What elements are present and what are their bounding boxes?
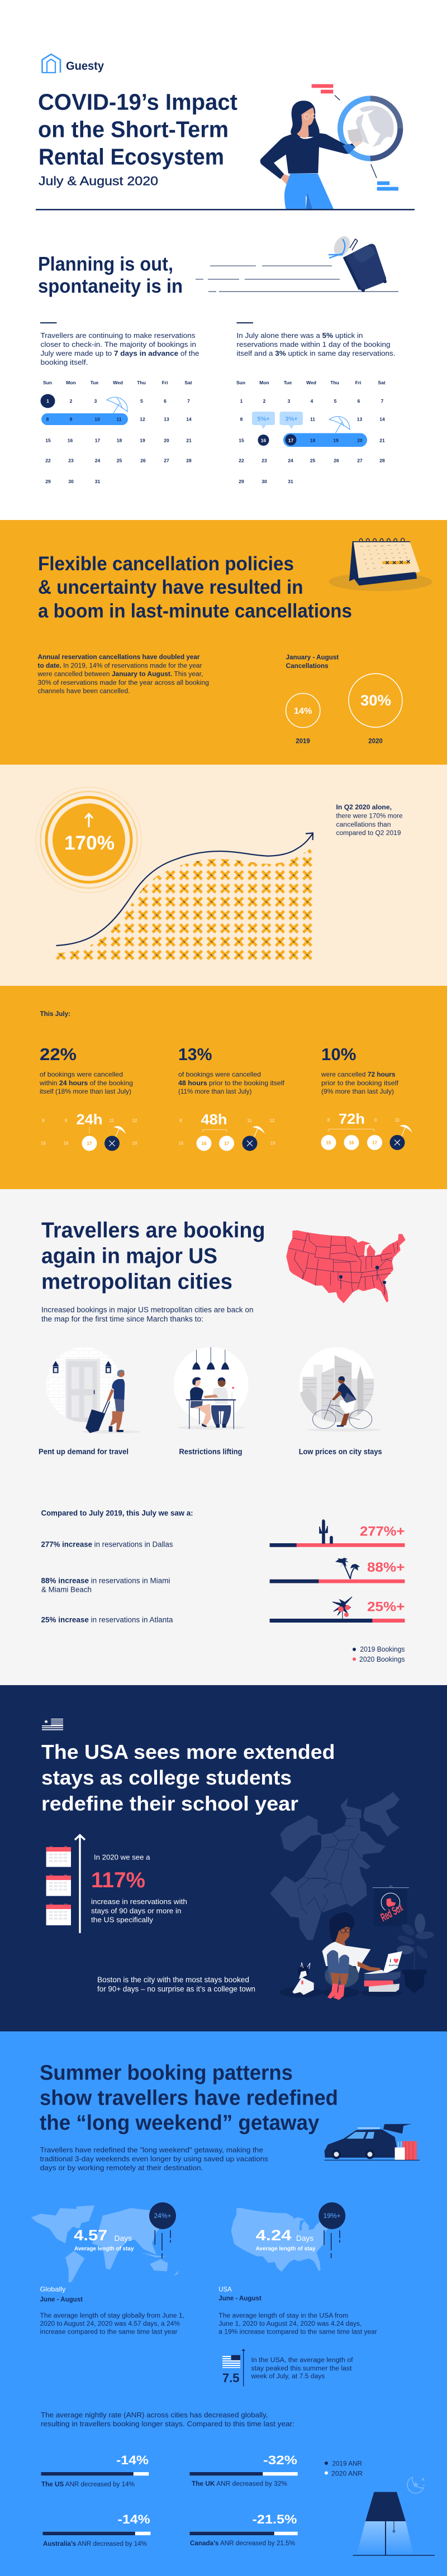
calendar: right: 22 bbox=[239, 458, 244, 464]
mini calendar: 72h: 11 bbox=[395, 1118, 400, 1123]
mini calendar: 48h: 8 bbox=[179, 1118, 182, 1123]
legend: ANR: 2020 ANR bbox=[331, 2471, 363, 2478]
stat: 10 percent: were cancelled 72 hours bbox=[321, 1070, 396, 1078]
legend: ANR: 2019 ANR bbox=[332, 2461, 362, 2468]
calendar: left: 23 bbox=[68, 458, 74, 464]
text block: right: itself and a 3% uptick in same day reservations. bbox=[237, 350, 396, 357]
row: Miami: 88% increase in reservations in Miami bbox=[41, 1576, 170, 1585]
stat: 22 percent: of bookings were cancelled bbox=[40, 1070, 123, 1078]
calendar: right: 27 bbox=[357, 458, 363, 464]
calendar: left: Sun bbox=[43, 380, 52, 385]
calendar: left: 16 bbox=[68, 438, 73, 443]
bar: Canada ANR: -21.5% bbox=[253, 2512, 297, 2526]
map: world average stay: 4.57 bbox=[74, 2227, 107, 2244]
map: USA average stay bbox=[231, 2202, 345, 2272]
text block: Q2 2020: there were 170% more bbox=[336, 813, 402, 820]
stat: 13 percent bbox=[178, 1044, 285, 1095]
calendar: right: 13 bbox=[357, 417, 362, 422]
heading: USA extended stays: The USA sees more extended bbox=[41, 1740, 335, 1763]
text block: globally bbox=[40, 2286, 184, 2336]
legend: ANR bbox=[325, 2461, 363, 2478]
heading: travellers booking: Travellers are booking bbox=[41, 1219, 265, 1242]
text block: annual cancellations: channels have been cancelled. bbox=[38, 688, 130, 695]
stat: 117 percent: the US specifically bbox=[91, 1916, 154, 1924]
map: world average stay: Average length of stay bbox=[74, 2246, 134, 2252]
mini calendar: 72h bbox=[321, 1110, 412, 1150]
text block: USA: USA bbox=[218, 2286, 232, 2293]
panel: header and planning bbox=[0, 0, 447, 520]
calendar: left: 26 bbox=[140, 458, 146, 464]
mini calendar: 72h: 72h bbox=[339, 1110, 365, 1127]
chart: cancellation circles: 2020 bbox=[368, 738, 383, 745]
heading: cancellation: a boom in last-minute cancellations bbox=[38, 600, 352, 622]
arrow: upward bbox=[75, 1835, 85, 1933]
logo: Guesty: Guesty bbox=[66, 60, 104, 73]
text block: annual cancellations: to date. In 2019, 14% of reservations made for the year bbox=[38, 662, 202, 669]
calendar: left: 2 bbox=[70, 398, 73, 404]
mini calendar: 72h: 17 bbox=[372, 1141, 377, 1145]
calendar: left: 31 bbox=[95, 479, 100, 484]
calendar: left: 19 bbox=[140, 438, 145, 443]
text block: left: booking itself. bbox=[40, 359, 88, 366]
text block: ANR: resulting in travellers booking longer stays. Compared to this time last year: bbox=[41, 2420, 294, 2428]
calendar: left: Wed bbox=[113, 380, 123, 385]
text block: increased bookings: the map for the first time since March thanks to: bbox=[41, 1315, 203, 1323]
illustration: couple at restaurant table bbox=[174, 1347, 248, 1429]
row: Atlanta bbox=[41, 1597, 405, 1624]
row: Dallas bbox=[41, 1520, 405, 1548]
calendar: right: 18 bbox=[310, 438, 315, 443]
text block: USA: The average length of stay in the USA from bbox=[218, 2312, 348, 2319]
heading: summer patterns bbox=[40, 2061, 338, 2135]
row: Miami: & Miami Beach bbox=[41, 1585, 92, 1594]
stat: 22 percent: itself (18% more than last July) bbox=[40, 1087, 131, 1095]
title: COVID-19’s Impact bbox=[38, 89, 237, 115]
bar: US ANR bbox=[41, 2453, 149, 2488]
heading: cancellation bbox=[38, 553, 352, 622]
chart: cancellation circles: Cancellations bbox=[286, 663, 329, 670]
text block: Q2 2020: compared to Q2 2019 bbox=[336, 830, 401, 837]
mini calendar: 24h: 12 bbox=[132, 1118, 137, 1123]
text block: annual cancellations: were cancelled between January to August. This year, bbox=[37, 671, 203, 678]
illustration: desk calendar bbox=[329, 538, 432, 591]
mini calendar: 72h: 8 bbox=[327, 1118, 330, 1123]
text block: long weekend: traditional 3-day weekends even longer by using saved up vacations bbox=[40, 2155, 268, 2163]
heading: travellers booking: again in major US bbox=[41, 1244, 217, 1268]
stat: 117 percent: increase in reservations with bbox=[91, 1897, 187, 1906]
illustration: student with dog, books and pennant bbox=[279, 1886, 434, 2000]
text block: USA: June - August bbox=[218, 2296, 261, 2302]
illustration: Boston map bbox=[270, 1792, 400, 1940]
chart: cancellation circles bbox=[286, 655, 402, 745]
calendar: right: Wed bbox=[306, 380, 316, 385]
calendar: right: 28 bbox=[379, 458, 385, 464]
bar: UK ANR: -32% bbox=[263, 2453, 297, 2467]
calendar: left: 25 bbox=[117, 458, 122, 464]
calendar: right: Mon bbox=[259, 380, 269, 385]
map: world average stay: 24%+ bbox=[154, 2213, 172, 2220]
calendar: left: 13 bbox=[164, 417, 169, 422]
text block: right bbox=[237, 322, 396, 357]
panel: this July bbox=[0, 986, 447, 1189]
label: pent up demand: Pent up demand for travel bbox=[39, 1448, 129, 1456]
calendar: left: 10 bbox=[94, 417, 100, 422]
bar: UK ANR bbox=[189, 2453, 298, 2488]
mini calendar: 48h: 48h bbox=[201, 1111, 227, 1128]
calendar: right: 24 bbox=[288, 458, 293, 464]
stat: 22 percent: within 24 hours of the booking bbox=[39, 1079, 133, 1087]
callout: 7.5 days: stay peaked this summer the last bbox=[251, 2365, 352, 2372]
panel: 170 percent chart bbox=[0, 765, 447, 986]
text block: annual cancellations bbox=[37, 654, 209, 695]
row: Atlanta: 25%+ bbox=[367, 1600, 405, 1614]
stat: 10 percent bbox=[321, 1044, 399, 1095]
text block: globally: increase compared to the same time last year bbox=[40, 2329, 178, 2336]
logo: Guesty bbox=[42, 54, 104, 73]
label: this July: This July: bbox=[40, 1011, 70, 1018]
text block: Boston: Boston is the city with the most stays booked bbox=[97, 1976, 249, 1984]
illustration: woman holding globe bbox=[260, 84, 400, 209]
mini calendar: 72h: 0 bbox=[374, 1118, 377, 1123]
illustration: cyclist in the city bbox=[299, 1347, 381, 1432]
calendar: left: 7 bbox=[187, 398, 190, 404]
calendar: left: 3 bbox=[94, 398, 97, 404]
stat: 13 percent: (11% more than last July) bbox=[178, 1087, 251, 1095]
calendar: right: 17 bbox=[288, 438, 293, 443]
callout: 7.5 days: week of July, at 7.5 days bbox=[250, 2373, 325, 2380]
bar: Canada ANR: Canada’s ANR decreased by 21.5% bbox=[190, 2540, 295, 2547]
calendar: left: 17 bbox=[95, 438, 100, 443]
text block: left bbox=[40, 322, 199, 366]
heading: cancellation: & uncertainty have resulted in bbox=[38, 576, 303, 598]
calendar: right: 6 bbox=[358, 398, 360, 404]
callout: 7.5 days bbox=[222, 2349, 353, 2386]
text block: annual cancellations: Annual reservation cancellations have doubled year bbox=[38, 654, 200, 661]
stat: 10 percent: (9% more than last July) bbox=[321, 1087, 394, 1095]
calendar: left: 15 bbox=[45, 438, 51, 443]
text block: increased bookings: Increased bookings in major US metropolitan cities are back on bbox=[41, 1306, 254, 1314]
map: world average stay: Days bbox=[114, 2234, 132, 2243]
heading: cancellation: Flexible cancellation policies bbox=[38, 553, 294, 575]
stat: 117 percent: 117% bbox=[91, 1868, 145, 1892]
icon: three calendars bbox=[46, 1846, 71, 1925]
panel: summer booking patterns bbox=[0, 2031, 447, 2576]
callout: 7.5 days: 7.5 bbox=[222, 2371, 239, 2385]
calendar: right: 20 bbox=[357, 438, 363, 443]
title: Rental Ecosystem bbox=[39, 144, 224, 170]
text block: right: In July alone there was a 5% uptick in bbox=[237, 332, 363, 340]
arrow: growth curve bbox=[56, 833, 313, 946]
mini calendar: 24h: 11 bbox=[110, 1118, 115, 1123]
calendar: left: 18 bbox=[117, 438, 122, 443]
mini calendar: 48h: 17 bbox=[224, 1141, 230, 1146]
calendar: right: 30 bbox=[261, 479, 267, 484]
text block: Boston: for 90+ days – no surprise as it’s a college town bbox=[97, 1985, 255, 1993]
calendar: right: Sat bbox=[378, 380, 386, 385]
row: Dallas: 277% increase in reservations in Dallas bbox=[41, 1540, 173, 1548]
heading: planning: Planning is out, bbox=[38, 254, 173, 275]
map: USA average stay: Days bbox=[296, 2234, 313, 2243]
mini calendar: 24h: 9 bbox=[65, 1118, 68, 1123]
bar: Canada ANR bbox=[189, 2512, 298, 2547]
calendar: right: 25 bbox=[310, 458, 315, 464]
map: USA average stay: Average length of stay bbox=[256, 2246, 316, 2252]
mini calendar: 24h: 17 bbox=[87, 1141, 92, 1146]
row: Miami bbox=[41, 1558, 405, 1594]
calendar: left: 20 bbox=[164, 438, 169, 443]
chart: small marker bbox=[307, 849, 312, 853]
calendar: left: 12 bbox=[140, 417, 145, 422]
calendar: left: 29 bbox=[45, 479, 51, 484]
illustration: student with dog, books and pennant: Red Sox bbox=[378, 1901, 406, 1924]
calendar: left: 5 bbox=[140, 398, 143, 404]
chart: cancellation circles: January - August bbox=[286, 655, 339, 661]
heading: summer patterns: show travellers have redefined bbox=[40, 2087, 338, 2110]
divider bbox=[36, 209, 415, 210]
calendar: left: 1 bbox=[46, 398, 49, 404]
stat: 22 percent bbox=[39, 1044, 133, 1095]
text block: ANR bbox=[41, 2411, 294, 2428]
text block: globally: Globally bbox=[40, 2286, 66, 2293]
text block: USA: June 1, 2020 to August 24, 2020 was 4.24 days, bbox=[218, 2321, 362, 2327]
map: USA average stay: 19%+ bbox=[324, 2213, 341, 2220]
chart: cancellation circles: 2019 bbox=[296, 738, 310, 745]
text block: globally: 2020 to August 24, 2020 was 4.57 days, a 24% bbox=[40, 2321, 180, 2327]
calendar: right: 5%+ bbox=[257, 416, 270, 422]
text block: ANR: The average nightly rate (ANR) across cities has decreased globally, bbox=[41, 2411, 268, 2419]
bar: US ANR: -14% bbox=[116, 2453, 149, 2467]
calendar: right: 19 bbox=[333, 438, 339, 443]
stat circle: 170% bbox=[36, 787, 142, 893]
calendar: right: Sun bbox=[236, 380, 245, 385]
illustration: student with dog, books and pennant: I bbox=[389, 1958, 391, 1963]
text block: long weekend bbox=[40, 2146, 268, 2172]
subtitle: July & August 2020 bbox=[39, 174, 158, 188]
heading: compared to July: Compared to July 2019, this July we saw a: bbox=[41, 1509, 193, 1517]
mini calendar: 72h: 15 bbox=[326, 1141, 331, 1145]
calendar: right: Tue bbox=[284, 380, 292, 385]
calendar: left: 9 bbox=[70, 417, 73, 422]
heading: planning: spontaneity is in bbox=[38, 275, 183, 297]
title: on the Short-Term bbox=[38, 116, 229, 142]
calendar: left: Sat bbox=[184, 380, 192, 385]
text block: left: closer to check-in. The majority of bookings in bbox=[40, 341, 196, 349]
chart: cancellation circles: 30% bbox=[360, 692, 391, 709]
calendar: right: 31 bbox=[288, 479, 293, 484]
text block: USA bbox=[218, 2286, 377, 2336]
calendar: left: Fri bbox=[162, 380, 168, 385]
mini calendar: 48h: 19 bbox=[270, 1141, 275, 1146]
text block: globally: June - August bbox=[40, 2297, 83, 2303]
stat: 13 percent: 48 hours prior to the booking itself bbox=[178, 1079, 285, 1087]
map: USA with pins bbox=[286, 1230, 406, 1303]
mini calendar: 48h: 11 bbox=[247, 1118, 252, 1123]
mini calendar: 24h: 16 bbox=[64, 1141, 69, 1146]
heading: USA extended stays bbox=[41, 1740, 335, 1815]
calendar: right: 14 bbox=[379, 417, 385, 422]
panel: metropolitan cities bbox=[0, 1189, 447, 1685]
calendar: left: 11 bbox=[116, 417, 122, 422]
mini calendar: 24h: 15 bbox=[41, 1141, 46, 1146]
row: Dallas: 277%+ bbox=[360, 1524, 405, 1539]
callout: 7.5 days: In the USA, the average length of bbox=[251, 2357, 353, 2364]
stat: 13 percent: of bookings were cancelled bbox=[178, 1070, 261, 1078]
text block: left: July were made up to 7 days in advance of the bbox=[40, 350, 199, 357]
mini calendar: 24h: 19 bbox=[132, 1141, 137, 1146]
stat: 117 percent: In 2020 we see a bbox=[94, 1853, 150, 1861]
illustration: man with suitcase at door bbox=[46, 1347, 141, 1433]
bar: Australia ANR: Australia’s ANR decreased by 14% bbox=[43, 2541, 147, 2548]
illustration: suitcase with speed lines bbox=[196, 233, 398, 292]
stat: 10 percent: prior to the booking itself bbox=[321, 1079, 399, 1087]
calendar: right: 4 bbox=[311, 398, 313, 404]
calendar: right: Thu bbox=[330, 380, 339, 385]
label: low prices: Low prices on city stays bbox=[299, 1448, 382, 1456]
heading: travellers booking: metropolitan cities bbox=[41, 1270, 232, 1294]
map: world average stay bbox=[31, 2202, 179, 2283]
heading: travellers booking bbox=[41, 1219, 265, 1294]
calendar: left: 27 bbox=[164, 458, 169, 464]
calendar: right: 21 bbox=[379, 438, 385, 443]
calendar: left: 28 bbox=[186, 458, 192, 464]
mini calendar: 72h: 16 bbox=[349, 1141, 354, 1145]
mini calendar: 48h bbox=[179, 1111, 275, 1151]
calendar: right: 5 bbox=[334, 398, 337, 404]
chart: growth area of crosses bbox=[54, 852, 314, 962]
calendar: left: 14 bbox=[186, 417, 192, 422]
calendar: left: 8 bbox=[46, 417, 49, 422]
map: USA average stay: 4.24 bbox=[256, 2227, 292, 2244]
calendar: left bbox=[40, 380, 192, 484]
calendar: left: 30 bbox=[68, 479, 74, 484]
bar: Australia ANR: -14% bbox=[118, 2512, 150, 2526]
calendar: left: Mon bbox=[66, 380, 76, 385]
text block: Q2 2020: cancellations than bbox=[336, 822, 391, 828]
calendar: right: 1 bbox=[240, 398, 243, 404]
calendar: right: 8 bbox=[240, 417, 243, 422]
text block: Q2 2020 bbox=[336, 804, 402, 837]
mini calendar: 24h bbox=[41, 1111, 137, 1151]
mini calendar: 24h: 8 bbox=[42, 1118, 45, 1123]
legend: bookings: 2020 Bookings bbox=[359, 1656, 405, 1663]
calendar: left: Tue bbox=[91, 380, 99, 385]
heading: USA extended stays: stays as college students bbox=[41, 1766, 292, 1789]
calendar: right: 15 bbox=[239, 438, 244, 443]
row: Miami: 88%+ bbox=[367, 1560, 405, 1575]
stat: 117 percent: stays of 90 days or more in bbox=[91, 1907, 181, 1915]
text block: globally: The average length of stay globally from June 1, bbox=[40, 2312, 184, 2319]
text block: long weekend: Travellers have redefined the "long weekend" getaway, making the bbox=[40, 2146, 263, 2154]
mini calendar: 48h: 16 bbox=[202, 1141, 207, 1146]
mini calendar: 48h: 15 bbox=[179, 1141, 184, 1146]
illustration: car with luggage bbox=[325, 2124, 420, 2160]
stat: 22 percent: 22% bbox=[40, 1044, 77, 1064]
heading: summer patterns: the “long weekend” getaway bbox=[40, 2111, 320, 2135]
mini calendar: 24h: 24h bbox=[76, 1111, 103, 1128]
heading: summer patterns: Summer booking patterns bbox=[40, 2061, 293, 2084]
row: Atlanta: 25% increase in reservations in Atlanta bbox=[41, 1615, 173, 1624]
calendar: right: 16 bbox=[261, 438, 266, 443]
text block: left: Travellers are continuing to make reservations bbox=[40, 332, 196, 340]
calendar: right: Fri bbox=[355, 380, 361, 385]
stat: 117 percent bbox=[91, 1853, 187, 1924]
calendar: left: 21 bbox=[186, 438, 192, 443]
calendar: right: 2 bbox=[263, 398, 266, 404]
text block: long weekend: days or by working remotely at their destination. bbox=[40, 2164, 203, 2172]
text block: Q2 2020: In Q2 2020 alone, bbox=[336, 804, 392, 811]
title bbox=[38, 89, 237, 170]
calendar: left: Thu bbox=[137, 380, 146, 385]
calendar: right: 3%+ bbox=[285, 416, 298, 422]
stat circle: 170%: 170% bbox=[64, 832, 115, 854]
stat: 13 percent: 13% bbox=[178, 1044, 212, 1064]
calendar: right: 23 bbox=[261, 458, 267, 464]
text block: annual cancellations: 30% of reservations made for the year across all booking bbox=[38, 680, 209, 686]
calendar: left: 6 bbox=[164, 398, 167, 404]
bar: UK ANR: The UK ANR decreased by 32% bbox=[192, 2481, 287, 2488]
illustration: student with dog, books and pennant: BOSTON bbox=[389, 1964, 398, 1967]
calendar: right: 26 bbox=[334, 458, 339, 464]
heading: planning bbox=[38, 254, 183, 297]
text block: Boston bbox=[97, 1976, 255, 1993]
panel: extended stays bbox=[0, 1685, 447, 2031]
text block: increased bookings bbox=[41, 1306, 254, 1323]
bar: US ANR: The US ANR decreased by 14% bbox=[41, 2481, 135, 2488]
calendar: left: 22 bbox=[45, 458, 51, 464]
calendar: right: 7 bbox=[381, 398, 384, 404]
chart: cancellation circles: 14% bbox=[294, 707, 312, 716]
calendar: right bbox=[236, 380, 386, 484]
icon: flag bbox=[42, 1719, 63, 1730]
calendar: right: 11 bbox=[310, 417, 315, 422]
text block: right: reservations made within 1 day of the booking bbox=[237, 341, 391, 349]
calendar: right: 29 bbox=[239, 479, 244, 484]
panel: flexible cancellation bbox=[0, 520, 447, 765]
legend: bookings bbox=[353, 1645, 405, 1663]
legend: bookings: 2019 Bookings bbox=[360, 1645, 405, 1653]
calendar: left: 24 bbox=[95, 458, 100, 464]
bar: Australia ANR bbox=[42, 2512, 150, 2548]
stat: 10 percent: 10% bbox=[321, 1044, 356, 1064]
illustration: lamp and moon bbox=[353, 2477, 435, 2555]
label: restrictions lifting: Restrictions lifting bbox=[179, 1448, 242, 1456]
calendar: right: 3 bbox=[288, 398, 291, 404]
heading: USA extended stays: redefine their school year bbox=[41, 1792, 298, 1815]
mini calendar: 48h: 12 bbox=[270, 1118, 275, 1123]
text block: USA: a 19% increase tcompared to the same time last year bbox=[218, 2329, 377, 2336]
